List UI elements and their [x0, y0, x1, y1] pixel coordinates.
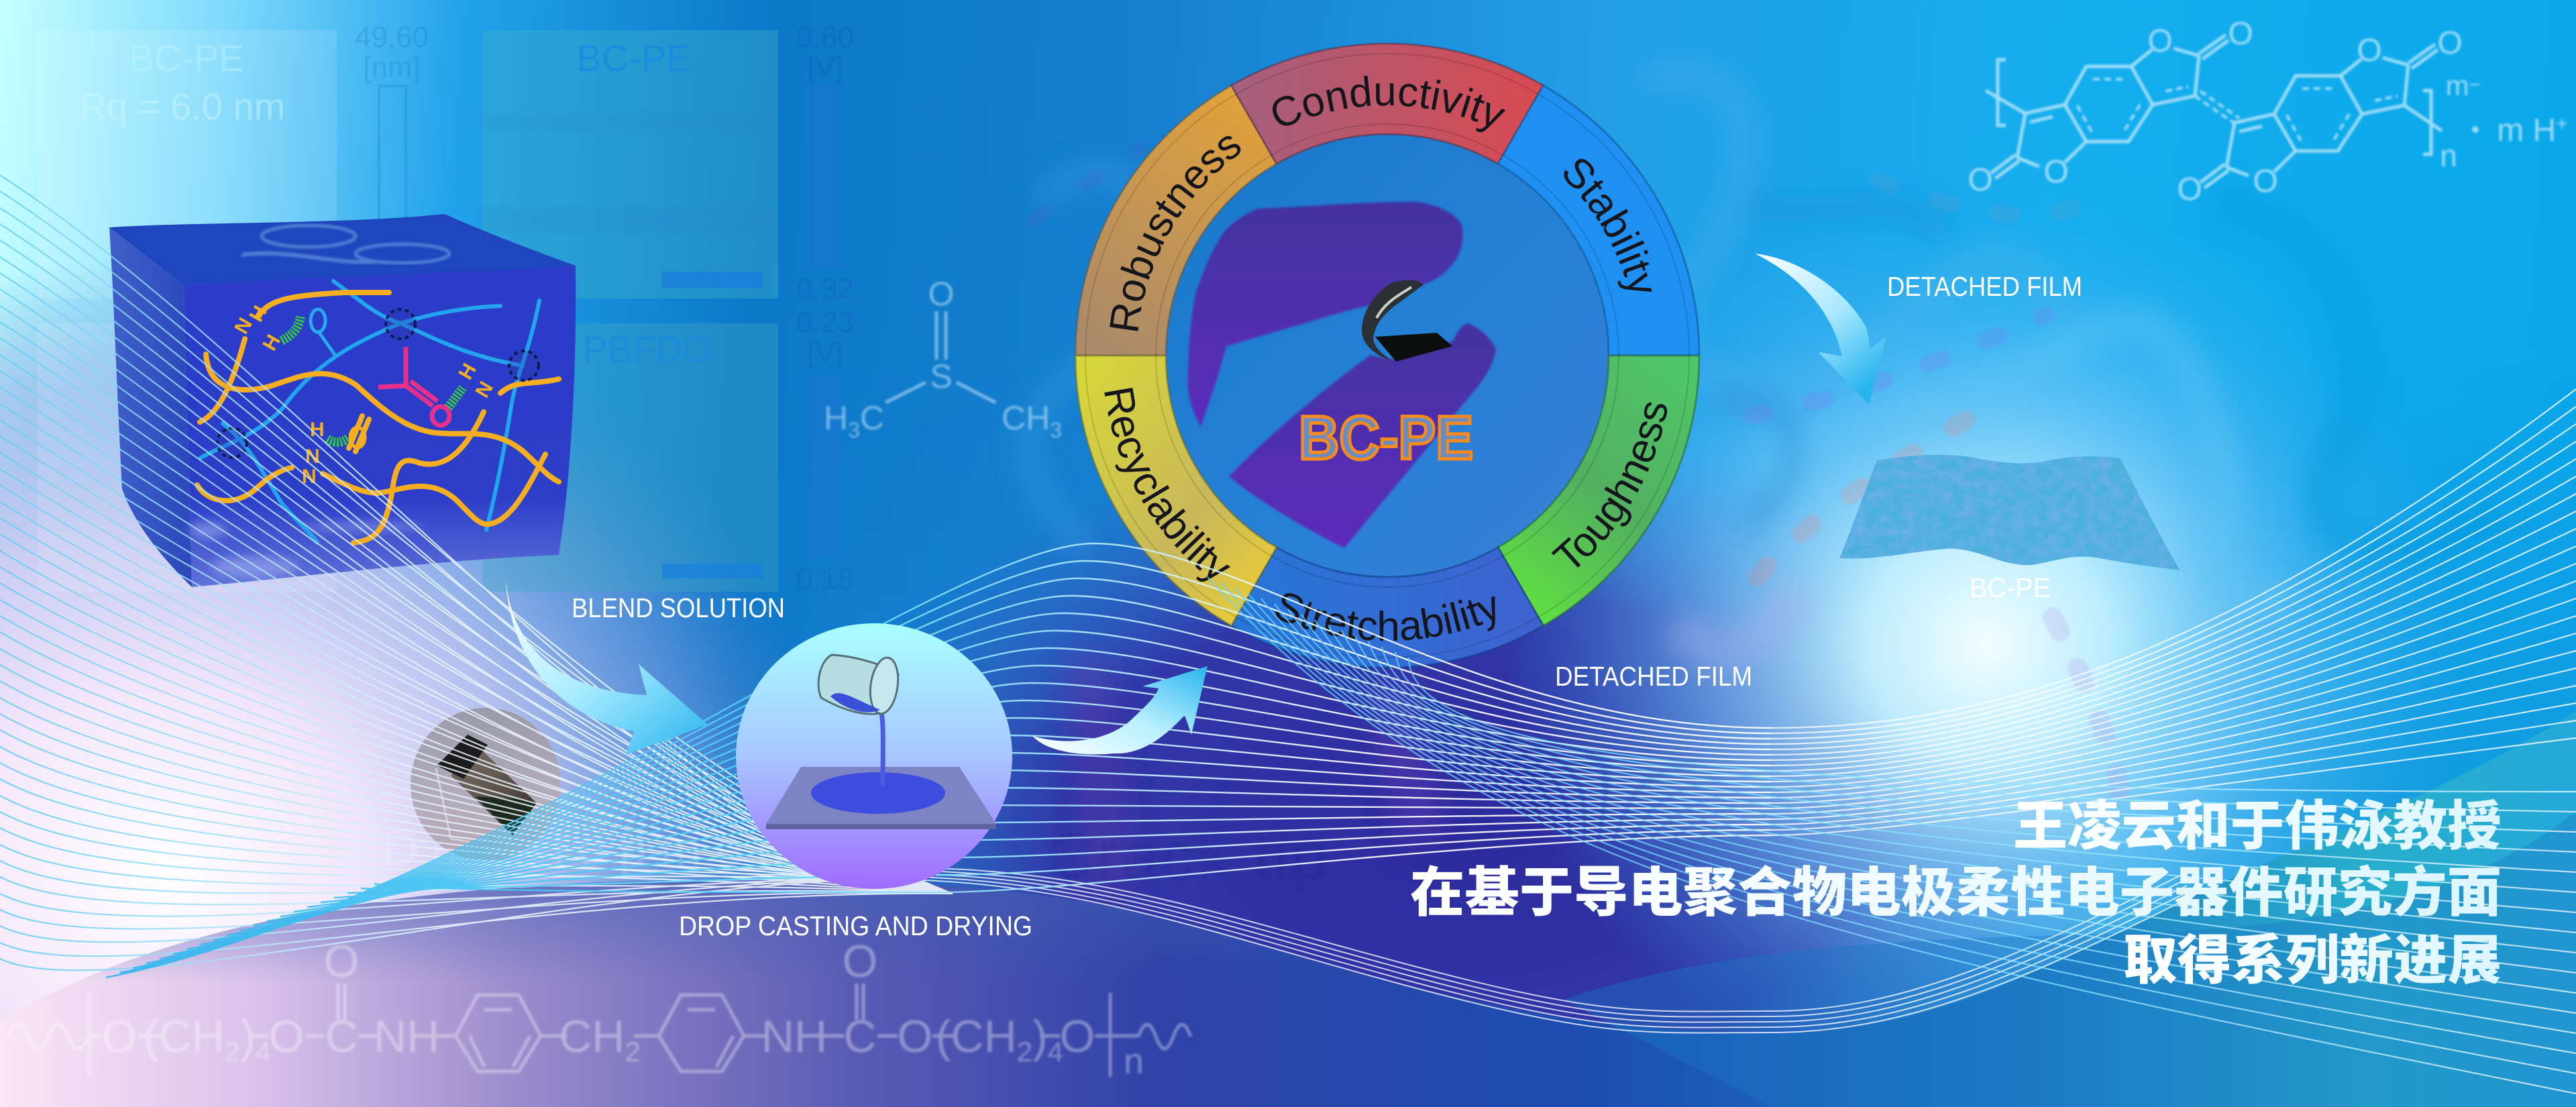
amine labels: N [302, 466, 317, 488]
polyurethane molecule: O [324, 936, 359, 987]
background dashed trails [1033, 148, 2120, 792]
blue polymer chains [200, 281, 539, 543]
PBFDO molecule: + [2556, 113, 2568, 135]
caption: drop casting and drying: DROP CASTING AND DRYING [679, 910, 1032, 941]
DMSO molecule: 3 [848, 418, 860, 442]
amine labels: N [471, 378, 498, 401]
polyurethane molecule: 2 [225, 1036, 240, 1067]
segment labels: Robustness [1110, 136, 1241, 331]
AFM panel: BC-PE height: Rq = 6.0 nm [80, 85, 285, 127]
BC-PE film [1839, 455, 2180, 570]
orange polymer chains [197, 293, 559, 543]
PBFDO molecule: O [2228, 16, 2253, 52]
title: 取得系列新进展 [2123, 931, 2502, 990]
arrow: ring to film [1755, 254, 1886, 405]
crosslink circles [217, 309, 539, 458]
PBFDO molecule: O [2177, 172, 2202, 207]
BC-PE label: BC-PE [1299, 404, 1473, 472]
PBFDO molecule: − [2469, 74, 2481, 96]
segment: robustness [1075, 85, 1277, 356]
polyurethane molecule: NH [374, 1011, 439, 1062]
polyurethane molecule: O [898, 1011, 932, 1062]
title: 在基于导电聚合物电极柔性电子器件研究方面 [1410, 863, 2502, 922]
cube body [109, 214, 576, 587]
curved mesh lines: descending sweep [1208, 577, 2576, 1094]
AFM panel: BC-PE potential: [V] [807, 336, 843, 369]
polyurethane molecule: NH [761, 1011, 827, 1062]
polyurethane molecule: 2 [625, 1036, 641, 1067]
curved mesh lines: left sweep [0, 175, 953, 970]
amine labels [230, 302, 498, 488]
AFM panel: BC-PE potential: 0.18 [796, 563, 854, 596]
amine labels: N [230, 314, 257, 338]
PBFDO molecule: O [1968, 162, 1993, 198]
PBFDO molecule: O [2357, 33, 2382, 68]
AFM panel: BC-PE potential: PBFDO [583, 328, 712, 370]
DMSO molecule [824, 275, 1062, 442]
caption: detached film lower: DETACHED FILM [1555, 661, 1752, 692]
polyurethane molecule: ) [240, 1011, 256, 1062]
caption: detached film upper: DETACHED FILM [1887, 271, 2082, 302]
segment: stretchability [1232, 547, 1543, 668]
AFM panel: BC-PE height: 49.60 [355, 21, 429, 54]
title: 王凌云和于伟泳教授 [2013, 796, 2502, 856]
polyurethane molecule: O [1060, 1011, 1095, 1062]
PBFDO molecule [1968, 16, 2568, 207]
ring bevel [1085, 54, 1689, 657]
amine labels: H [310, 419, 325, 441]
curved mesh lines: right fan [1771, 389, 2576, 835]
AFM panel: BC-PE potential: 0.23 [796, 306, 854, 339]
polyurethane molecule: 2 [1017, 1036, 1032, 1067]
faint background words: Crack tip [1046, 819, 1328, 894]
arrow: blend solution to casting [506, 579, 708, 755]
polyurethane molecule: (CH [144, 1011, 225, 1062]
polyurethane molecule: 4 [1048, 1036, 1063, 1067]
polyurethane molecule: CH [559, 1011, 625, 1062]
PBFDO molecule: O [2253, 164, 2278, 199]
DMSO molecule: O [928, 275, 954, 313]
polyurethane molecule: (CH [936, 1011, 1017, 1062]
vial photo [411, 708, 561, 861]
PBFDO molecule: O [2147, 23, 2173, 59]
substrate sheet [766, 767, 996, 829]
amine labels: H [245, 302, 272, 326]
property ring [1075, 43, 1700, 668]
AFM panel: BC-PE height: [nm] [363, 51, 421, 84]
AFM panel: BC-PE potential: [V] [807, 51, 843, 84]
segment: stability [1498, 85, 1699, 356]
AFM panel: BC-PE height [38, 21, 429, 592]
polyurethane molecule: O [843, 936, 877, 987]
AFM panel: BC-PE potential: 0.60 [796, 21, 854, 54]
segment labels: Recyclability [1104, 388, 1230, 582]
DMSO molecule: C [860, 399, 884, 437]
polyurethane molecule: C [325, 1011, 358, 1062]
polyurethane molecule: 4 [256, 1036, 271, 1067]
DMSO in network [378, 347, 449, 425]
amine labels: H [258, 331, 285, 354]
background swirl texture [1028, 74, 2496, 886]
faint background words [382, 819, 1328, 894]
arrow: casting to ring [1032, 666, 1208, 754]
segment labels: Conductivity [1272, 75, 1505, 132]
AFM panel: BC-PE potential [483, 21, 854, 596]
DMSO molecule: S [930, 358, 953, 395]
hydrogel cube with polymer network [109, 214, 576, 587]
faint background words: Development [382, 821, 812, 876]
title [1410, 796, 2502, 990]
curved mesh lines: arches [106, 543, 1771, 978]
segment: toughness [1498, 356, 1699, 626]
amine labels: N [305, 445, 320, 468]
segment: conductivity [1232, 44, 1543, 164]
PBFDO molecule: m H [2497, 113, 2556, 148]
polyurethane molecule: C [843, 1011, 877, 1062]
DMSO molecule: 3 [1050, 418, 1062, 442]
PBFDO molecule: m [2446, 70, 2469, 101]
caption: blend solution: BLEND SOLUTION [572, 592, 785, 623]
segment labels: Toughness [1551, 403, 1668, 568]
caption: BC-PE film: BC-PE [1970, 572, 2051, 603]
segment: recyclability [1075, 356, 1277, 626]
gloved finger: upper [1187, 202, 1462, 427]
polyurethane molecule [8, 936, 1191, 1082]
black film [1362, 280, 1452, 362]
segment labels: Stretchability [1276, 593, 1495, 641]
drop casting illustration [736, 623, 1012, 889]
PBFDO molecule: O [2043, 154, 2069, 190]
AFM panel: BC-PE height: BC-PE [129, 37, 244, 79]
poured stream [880, 707, 883, 786]
gloved finger: lower [1229, 323, 1496, 548]
polyurethane molecule: O [102, 1011, 137, 1062]
DMSO molecule: H [824, 399, 848, 437]
segment labels [1104, 75, 1668, 641]
amine labels: H [454, 360, 481, 384]
polyurethane molecule: n [1124, 1041, 1144, 1082]
blue puddle [811, 772, 945, 814]
circular backdrop [736, 623, 1012, 889]
lower wave band [0, 711, 2576, 1107]
curved mesh lines: lower wave tail [872, 867, 2187, 1033]
beaker [818, 655, 902, 715]
polyurethane molecule: ) [1032, 1011, 1048, 1062]
hydrogen bonds [282, 317, 463, 442]
PBFDO molecule: n [2440, 138, 2457, 173]
faint AFM panels, colour bars and labels [38, 21, 854, 596]
segment labels: Stability [1564, 158, 1652, 292]
AFM panel: BC-PE potential: BC-PE [576, 37, 692, 79]
carbonyl oxygens [311, 309, 335, 356]
PBFDO molecule: • [2471, 115, 2479, 143]
DMSO molecule: CH [1002, 399, 1050, 437]
polyurethane molecule: O [269, 1011, 304, 1062]
PBFDO molecule: O [2437, 25, 2463, 61]
inner disc [1163, 131, 1611, 580]
AFM panel: BC-PE potential: 0.32 [796, 272, 854, 305]
